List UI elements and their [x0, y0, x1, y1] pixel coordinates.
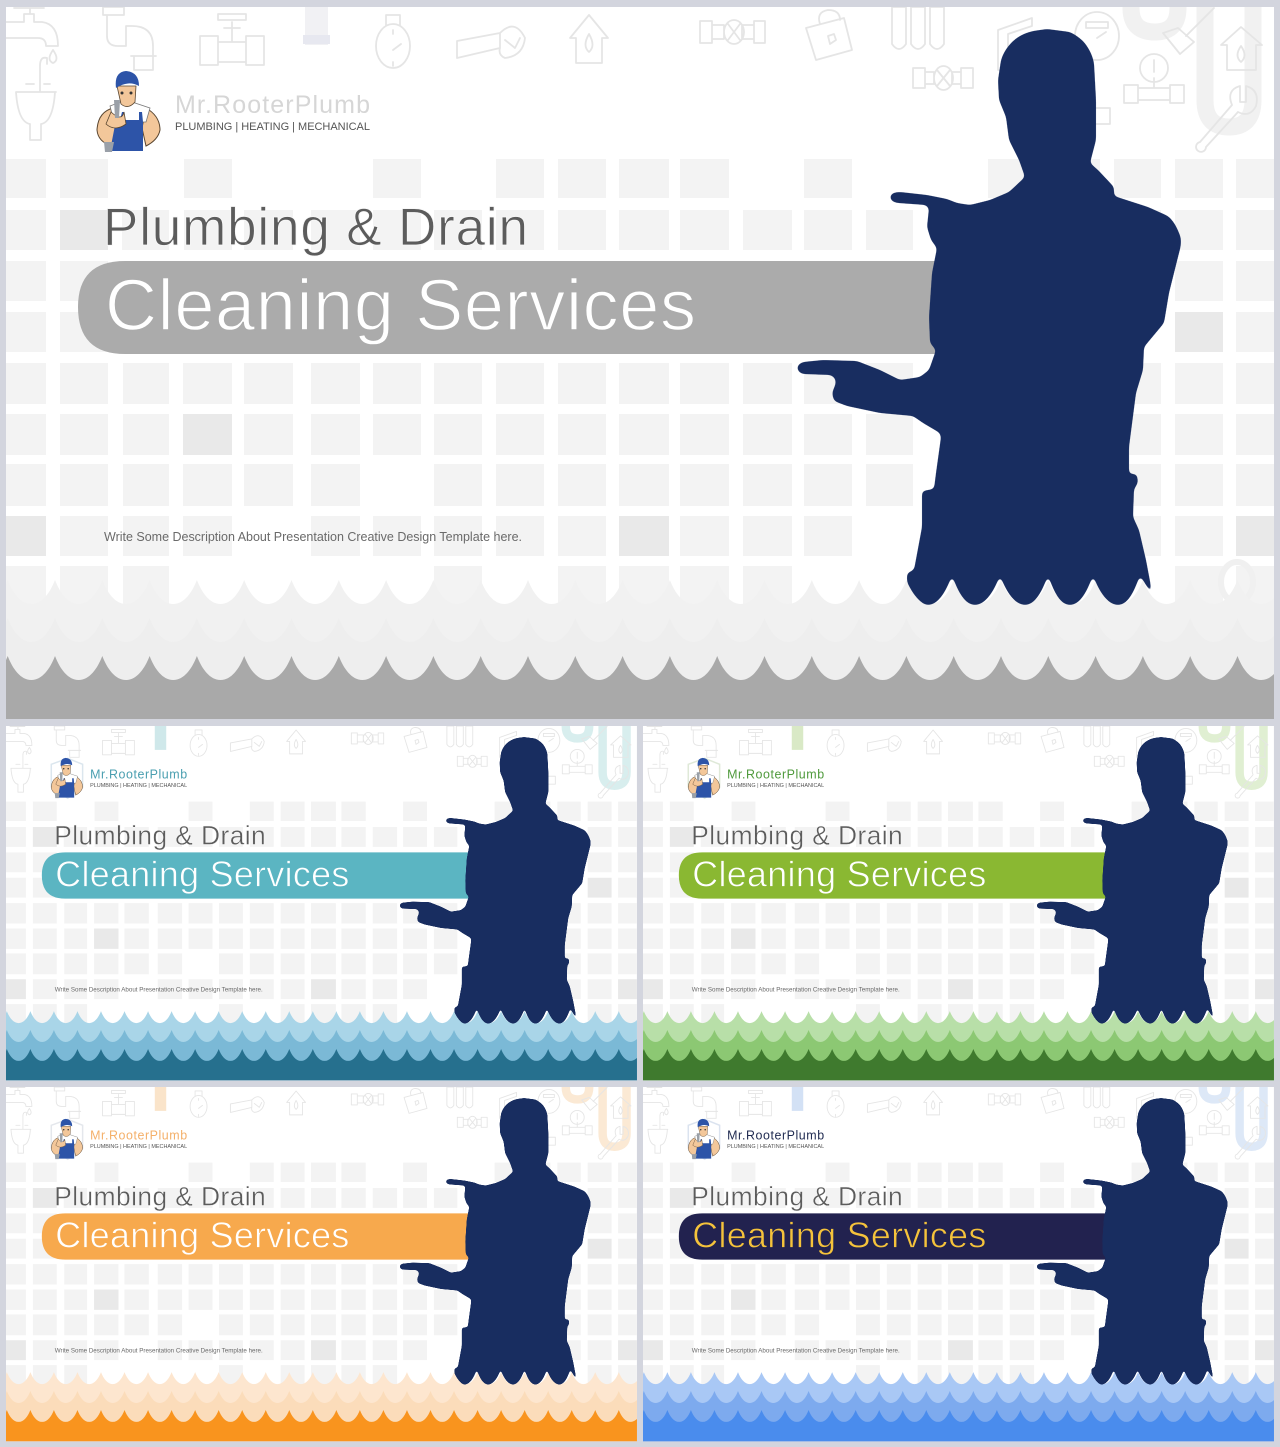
- logo: teal: [51, 758, 187, 798]
- title banner: green: Cleaning Services: [692, 855, 986, 895]
- logo: navy: PLUMBING | HEATING | MECHANICAL: [727, 1144, 824, 1150]
- wave layers: orange: [6, 1372, 637, 1442]
- panel: green slide: [643, 726, 1274, 1080]
- panel: main grey slide: [6, 7, 1274, 719]
- plumber silhouette: [1037, 737, 1228, 1024]
- heading: Plumbing & Drain: [54, 820, 266, 850]
- heading: Plumbing & Drain: [54, 1181, 266, 1211]
- logo: orange: [51, 1119, 187, 1159]
- plumber silhouette: [1037, 1098, 1228, 1385]
- logo: teal: Mr.RooterPlumb: [90, 768, 187, 782]
- title banner: orange: Cleaning Services: [55, 1216, 349, 1256]
- title banner: navy with yellow text: [679, 1213, 1108, 1260]
- description text: Write Some Description About Presentation Creative Design Template here.: [55, 987, 263, 994]
- logo: Mr.RooterPlumb: PLUMBING | HEATING | MECHANICAL: [175, 121, 370, 133]
- title banner: teal: [42, 852, 471, 899]
- logo: Mr.RooterPlumb: [97, 71, 370, 152]
- panel: teal slide: [6, 726, 637, 1080]
- heading: Plumbing & Drain: [691, 1181, 903, 1211]
- description text: Write Some Description About Presentation Creative Design Template here.: [104, 530, 522, 544]
- logo: teal: PLUMBING | HEATING | MECHANICAL: [90, 783, 187, 789]
- heading: Plumbing & Drain: Plumbing & Drain: [103, 198, 528, 257]
- title banner: Cleaning Services: [78, 261, 940, 354]
- wave layers: blue: [643, 1372, 1274, 1442]
- logo: navy: Mr.RooterPlumb: [727, 1129, 824, 1143]
- description text: Write Some Description About Presentation Creative Design Template here.: [692, 987, 900, 994]
- logo: navy: [688, 1119, 824, 1159]
- title banner: teal: Cleaning Services: [55, 855, 349, 895]
- logo: orange: PLUMBING | HEATING | MECHANICAL: [90, 1144, 187, 1150]
- title banner: orange: [42, 1213, 471, 1260]
- wave layers: green: [643, 1011, 1274, 1080]
- plumber silhouette: [400, 737, 591, 1024]
- heading: Plumbing & Drain: [691, 820, 903, 850]
- logo: green: Mr.RooterPlumb: [727, 768, 824, 782]
- title banner: Cleaning Services: Cleaning Services: [105, 266, 696, 346]
- title banner: navy with yellow text: Cleaning Services: [692, 1216, 986, 1256]
- panel: navy and blue slide: [620, 1084, 1280, 1447]
- logo: green: PLUMBING | HEATING | MECHANICAL: [727, 783, 824, 789]
- logo: green: [688, 758, 824, 798]
- plumber silhouette: [400, 1098, 591, 1385]
- description text: Write Some Description About Presentation Creative Design Template here.: [55, 1348, 263, 1355]
- panel: orange slide: [6, 1087, 637, 1442]
- logo: Mr.RooterPlumb: Mr.RooterPlumb: [175, 91, 370, 119]
- wave layers: teal: [6, 1011, 637, 1080]
- wave layers: [6, 559, 1274, 719]
- description text: Write Some Description About Presentation Creative Design Template here.: [692, 1348, 900, 1355]
- logo: orange: Mr.RooterPlumb: [90, 1129, 187, 1143]
- title banner: green: [679, 852, 1108, 899]
- plumber silhouette pointing: [797, 29, 1181, 605]
